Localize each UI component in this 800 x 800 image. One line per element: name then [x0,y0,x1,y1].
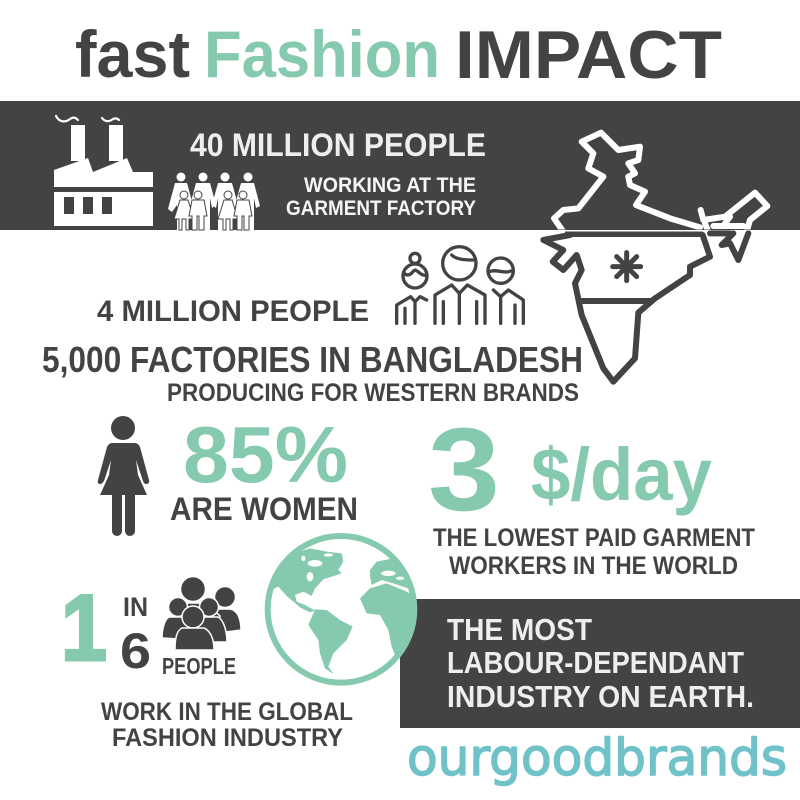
text: 1 in 6 people: 6 [120,623,151,679]
text: 3 dollars a day: 3 [428,404,500,536]
panel: most labour-dependant industry: THE MOST [447,612,592,647]
text: lowest paid garment workers [433,524,755,580]
text: 3 dollars a day [428,404,712,536]
text: 5,000 factories in Bangladesh: 5,000 FACTORIES IN BANGLADESH [42,339,583,380]
icon: three line-drawn people [397,247,523,323]
text: 1 in 6 people [61,575,236,680]
text: 1 in 6 people: 1 [61,575,107,680]
text: 4 million people: 4 MILLION PEOPLE [97,295,369,328]
title: Fashion [204,17,440,91]
panel: most labour-dependant industry: INDUSTRY ON EARTH. [447,679,754,714]
text: lowest paid garment workers: THE LOWEST PAID GARMENT [433,524,755,552]
logo: ourgoodbrands: ourgoodbrands [407,729,787,788]
text: 1 in 6 people: PEOPLE [162,653,236,679]
text: are women: ARE WOMEN [170,491,358,527]
title: fast [75,17,190,91]
text: work in the global fashion industry [101,698,353,752]
panel: most labour-dependant industry: LABOUR-DEPENDANT [447,645,744,680]
text: 40 million people: 40 MILLION PEOPLE [190,127,486,163]
icon: globe [268,536,420,683]
text: working at the garment factory [286,174,476,220]
panel: 40 million people band [0,101,800,230]
panel: most labour-dependant industry [400,599,800,728]
title: IMPACT [455,17,722,93]
text: work in the global fashion industry: FASHION INDUSTRY [112,724,343,752]
text: 3 dollars a day: $/day [531,433,712,516]
text: 1 in 6 people: IN [123,592,148,622]
text: working at the garment factory: WORKING AT THE [304,174,476,197]
text: working at the garment factory: GARMENT FACTORY [286,197,476,220]
icon: woman [98,416,149,536]
icon: crowd of people [162,576,241,650]
text: lowest paid garment workers: WORKERS IN THE WORLD [449,552,738,580]
icon: workers group [168,172,260,230]
text: producing for western brands: PRODUCING FOR WESTERN BRANDS [167,379,579,407]
icon: factory [54,116,153,226]
text: work in the global fashion industry: WORK IN THE GLOBAL [101,698,353,726]
icon: india map [543,133,767,382]
text: 85 percent: 85% [183,410,348,499]
title [75,17,722,93]
